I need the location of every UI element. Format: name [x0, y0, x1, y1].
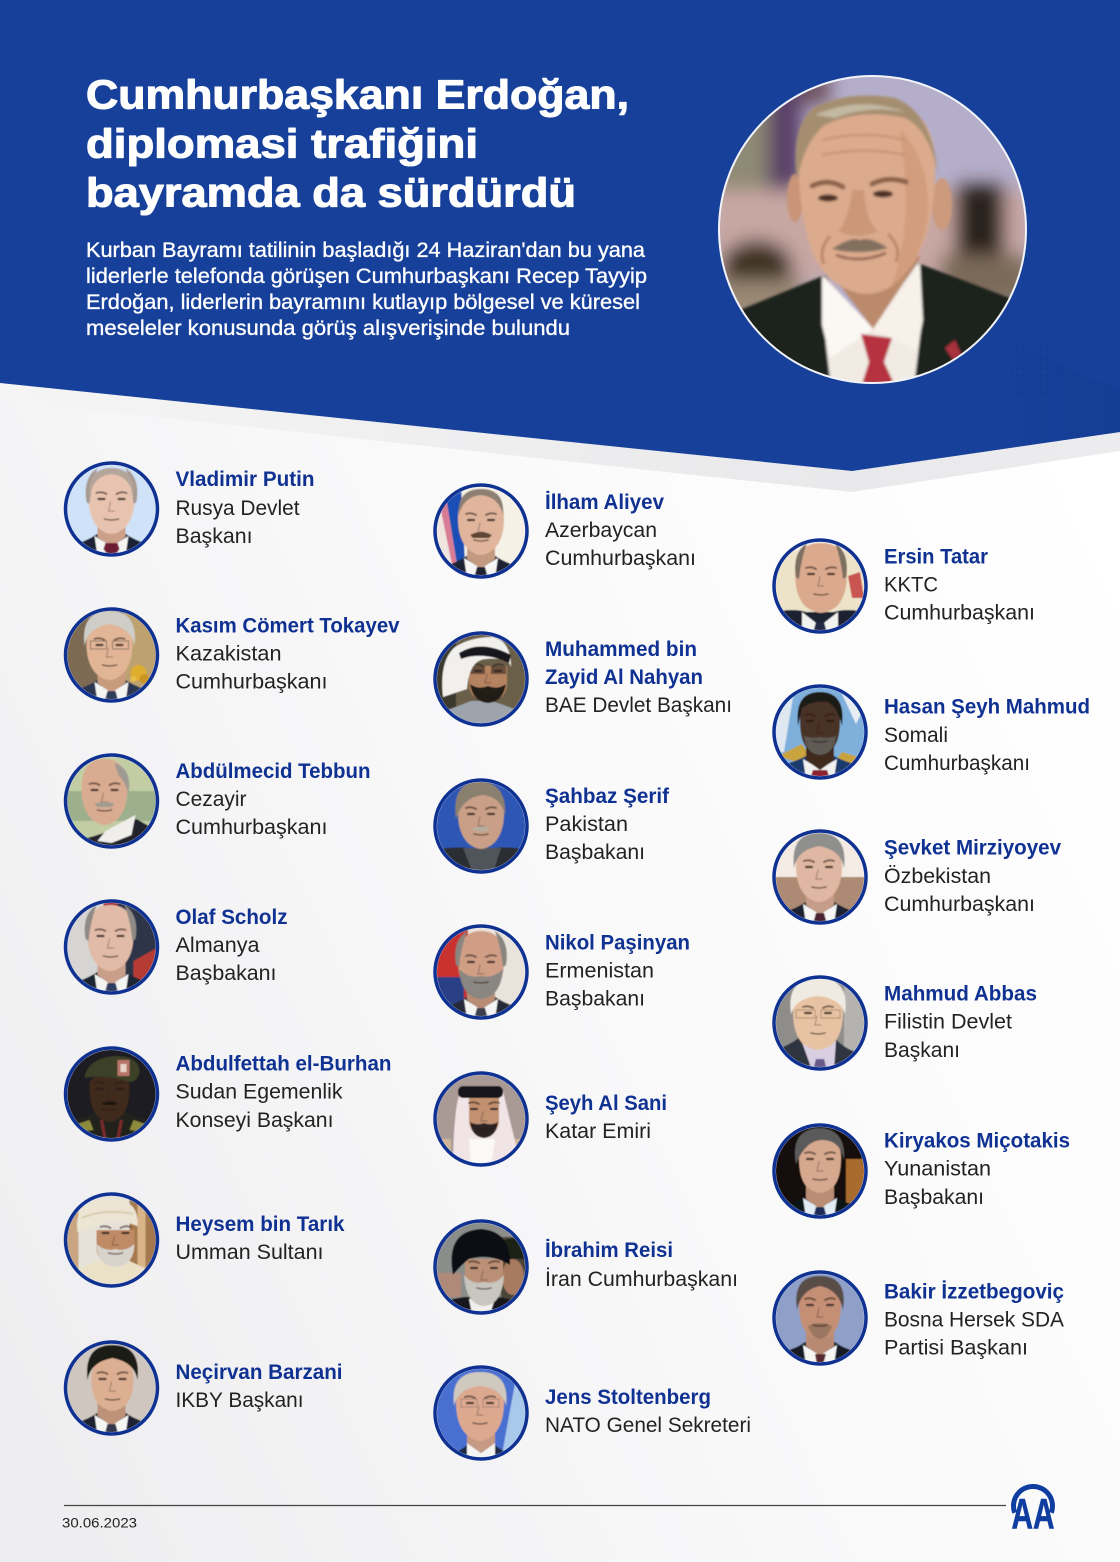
person: Nikol Paşinyan	[434, 925, 690, 1019]
portrait	[434, 1072, 528, 1166]
intro text: meseleler konusunda görüş alışverişinde bulundu	[86, 316, 570, 340]
title	[86, 72, 629, 216]
portrait	[434, 925, 528, 1019]
person: Kasım Cömert Tokayev	[64, 608, 400, 702]
role: Cumhurbaşkanı	[884, 602, 1035, 624]
name: Heysem bin Tarık	[176, 1213, 345, 1236]
logo: AA	[1012, 1486, 1054, 1538]
role: Başkanı	[176, 525, 252, 548]
role: Almanya	[176, 934, 260, 957]
role: Başbakanı	[545, 841, 645, 864]
portrait	[434, 779, 528, 873]
role: Ermenistan	[545, 960, 654, 982]
role: Pakistan	[545, 813, 628, 836]
intro text: Erdoğan, liderlerin bayramını kutlayıp bölgesel ve küresel	[86, 290, 640, 314]
person: Muhammed bin Zayid Al Nahyan	[434, 632, 732, 726]
name: Abdülmecid Tebbun	[176, 760, 370, 783]
role: Özbekistan	[884, 865, 991, 888]
role: Rusya Devlet	[176, 497, 300, 520]
portrait	[64, 608, 164, 702]
role: Kazakistan	[176, 642, 282, 666]
role: Cumhurbaşkanı	[545, 547, 696, 570]
name: Şevket Mirziyoyev	[884, 836, 1061, 860]
role: Başbakanı	[176, 962, 276, 985]
name: Mahmud Abbas	[884, 982, 1037, 1006]
portrait	[434, 632, 528, 726]
role: Cumhurbaşkanı	[176, 816, 328, 839]
person: Jens Stoltenberg	[434, 1366, 751, 1460]
portrait	[434, 1366, 528, 1460]
role	[884, 1010, 1012, 1062]
role: KKTC	[884, 574, 938, 596]
role	[545, 813, 645, 864]
portrait: Erdoğan	[718, 75, 1027, 384]
name: Bakir İzzetbegoviç	[884, 1280, 1064, 1304]
portrait	[773, 976, 868, 1070]
role: Cumhurbaşkanı	[884, 752, 1030, 775]
portrait	[773, 1271, 867, 1365]
role: Sudan Egemenlik	[176, 1080, 343, 1104]
name: İbrahim Reisi	[545, 1239, 673, 1262]
name	[545, 638, 703, 689]
title: diplomasi trafiğini	[86, 120, 478, 166]
role: Katar Emiri	[545, 1120, 651, 1143]
role: IKBY Başkanı	[176, 1389, 304, 1412]
role	[884, 865, 1035, 916]
portrait	[64, 1047, 158, 1141]
name: Neçirvan Barzani	[176, 1361, 342, 1384]
role: İran Cumhurbaşkanı	[545, 1268, 738, 1291]
role	[176, 642, 328, 694]
role	[545, 519, 696, 570]
portrait	[64, 754, 158, 848]
name: Olaf Scholz	[176, 906, 288, 929]
portrait	[64, 1341, 158, 1435]
name: İlham Aliyev	[545, 491, 664, 514]
portrait	[773, 1124, 868, 1218]
person: Şeyh Al Sani	[434, 1072, 667, 1166]
role	[884, 574, 1035, 624]
name: Şeyh Al Sani	[545, 1092, 667, 1115]
portrait	[434, 484, 528, 578]
portrait	[64, 462, 158, 556]
header shadow band	[0, 383, 1120, 492]
role	[176, 1080, 343, 1132]
logo: AA: AA	[1012, 1490, 1054, 1538]
name: Vladimir Putin	[176, 468, 314, 491]
role	[176, 934, 276, 985]
portrait	[773, 685, 867, 779]
role: Başkanı	[884, 1039, 960, 1062]
person: Olaf Scholz	[64, 900, 288, 994]
person: Vladimir Putin	[64, 462, 314, 556]
portrait	[773, 830, 867, 924]
role	[884, 1158, 991, 1209]
role: Başbakanı	[884, 1186, 984, 1209]
person: Abdulfettah el-Burhan	[64, 1047, 392, 1141]
person: Mahmud Abbas	[773, 976, 1037, 1070]
person: Şahbaz Şerif	[434, 779, 670, 873]
role	[545, 960, 654, 1010]
role	[176, 497, 300, 548]
title: bayramda da sürdürdü	[86, 170, 576, 216]
name: Şahbaz Şerif	[545, 785, 670, 808]
title: Cumhurbaşkanı Erdoğan,	[86, 72, 629, 118]
role	[884, 724, 1030, 775]
role: Bosna Hersek SDA	[884, 1308, 1064, 1332]
name: Kiryakos Miçotakis	[884, 1130, 1070, 1152]
role: NATO Genel Sekreteri	[545, 1414, 751, 1437]
role: Cezayir	[176, 788, 247, 811]
role: Umman Sultanı	[176, 1241, 324, 1264]
intro text	[86, 238, 647, 340]
role: Somali	[884, 724, 948, 747]
person: Bakir İzzetbegoviç	[773, 1271, 1064, 1365]
portrait	[64, 900, 162, 994]
name: Ersin Tatar	[884, 546, 988, 568]
portrait	[434, 1220, 528, 1314]
name: Zayid Al Nahyan	[545, 666, 703, 689]
person: İbrahim Reisi	[434, 1220, 738, 1314]
person: Kiryakos Miçotakis	[773, 1124, 1070, 1218]
name: Muhammed bin	[545, 638, 697, 661]
name: Hasan Şeyh Mahmud	[884, 696, 1090, 718]
role	[176, 788, 328, 839]
person: Heysem bin Tarık	[64, 1193, 345, 1287]
role: Cumhurbaşkanı	[884, 893, 1035, 916]
role: Filistin Devlet	[884, 1010, 1012, 1034]
role: Azerbaycan	[545, 519, 657, 542]
role: Yunanistan	[884, 1158, 991, 1180]
intro text: Kurban Bayramı tatilinin başladığı 24 Haziran'dan bu yana	[86, 238, 645, 262]
role: BAE Devlet Başkanı	[545, 694, 732, 717]
role: Başbakanı	[545, 988, 645, 1010]
person: Şevket Mirziyoyev	[773, 830, 1061, 924]
name: Nikol Paşinyan	[545, 932, 690, 954]
person: Neçirvan Barzani	[64, 1341, 342, 1435]
person: Hasan Şeyh Mahmud	[773, 685, 1090, 779]
date: 30.06.2023	[62, 1516, 137, 1530]
role	[884, 1308, 1064, 1360]
role: Cumhurbaşkanı	[176, 670, 328, 694]
role: Konseyi Başkanı	[176, 1109, 334, 1132]
name: Kasım Cömert Tokayev	[176, 614, 400, 638]
name: Abdulfettah el-Burhan	[176, 1052, 392, 1076]
person: İlham Aliyev	[434, 484, 696, 578]
header panel	[0, 0, 1120, 471]
person: Abdülmecid Tebbun	[64, 754, 370, 848]
intro text: liderlerle telefonda görüşen Cumhurbaşkanı Recep Tayyip	[86, 264, 647, 288]
person: Ersin Tatar	[773, 539, 1035, 633]
portrait	[773, 539, 867, 633]
portrait	[64, 1193, 160, 1287]
name: Jens Stoltenberg	[545, 1386, 711, 1409]
role: Partisi Başkanı	[884, 1336, 1028, 1360]
